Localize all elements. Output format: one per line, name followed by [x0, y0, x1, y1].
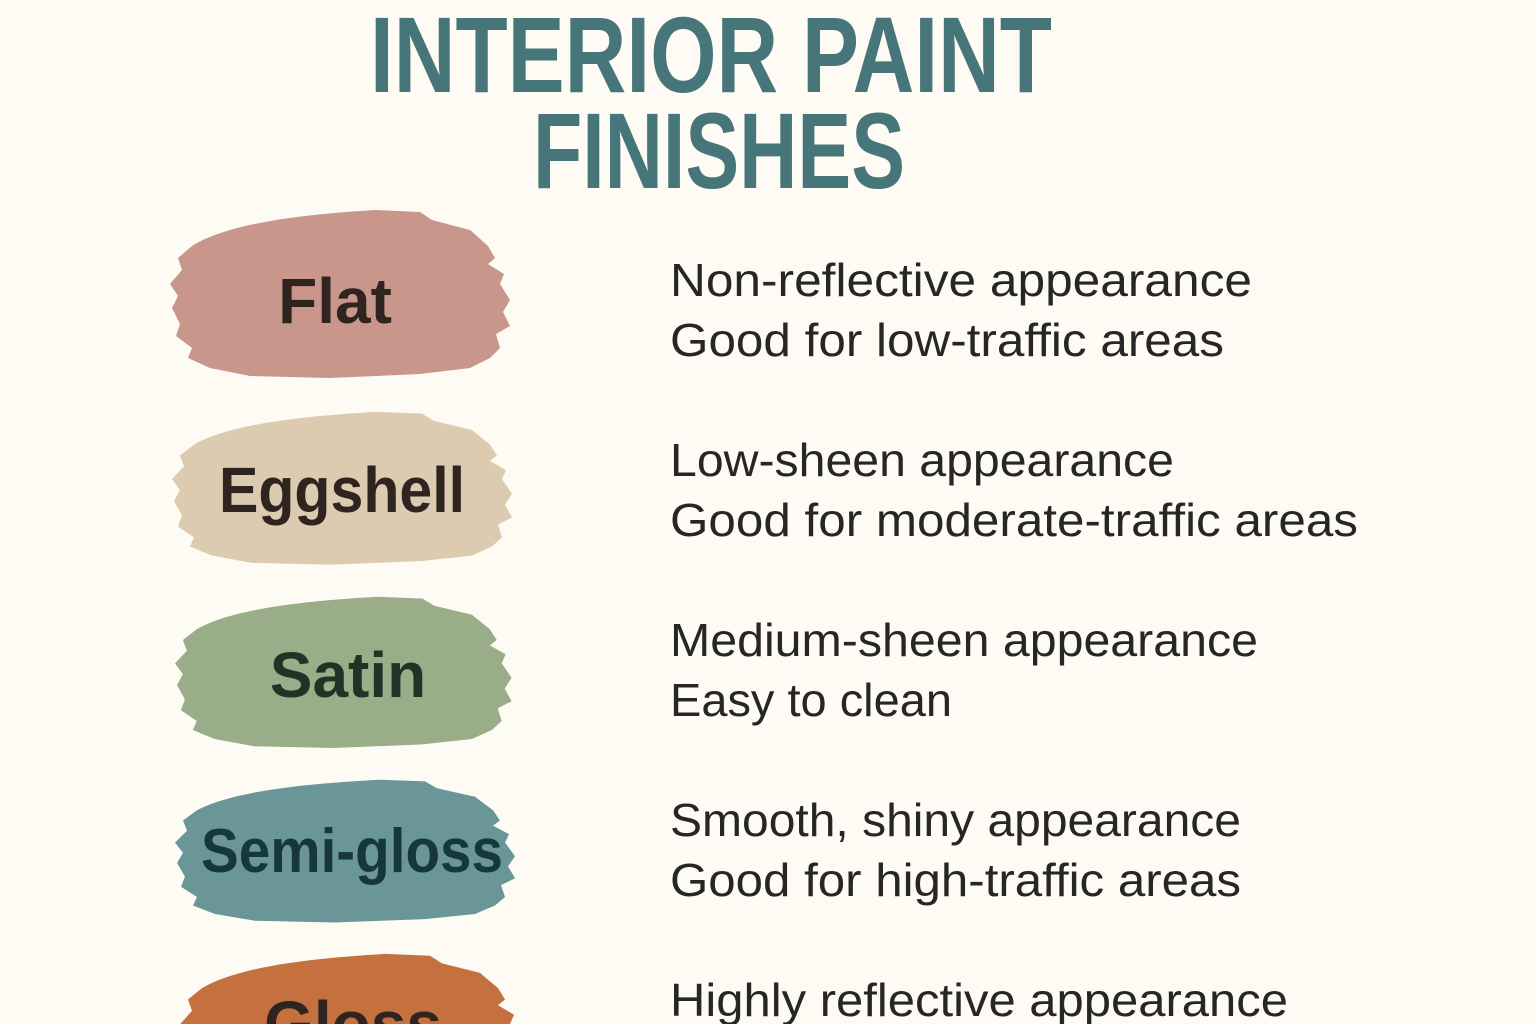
- desc: Eggshell: Good for moderate-traffic areas: [670, 494, 1358, 546]
- desc: Flat: Non-reflective appearance: [670, 254, 1252, 306]
- desc: Satin: Easy to clean: [670, 674, 952, 726]
- swatch: Flat: Flat: [278, 265, 392, 337]
- desc: Semi-gloss: Good for high-traffic areas: [670, 854, 1241, 906]
- swatch: Semi-gloss: [175, 780, 515, 922]
- desc: Flat: Good for low-traffic areas: [670, 314, 1224, 366]
- desc: Satin: Medium-sheen appearance: [670, 614, 1258, 666]
- swatch: Satin: Satin: [270, 639, 426, 711]
- desc: Eggshell: [670, 434, 1358, 546]
- desc: Semi-gloss: Smooth, shiny appearance: [670, 794, 1241, 846]
- desc: Flat: [670, 254, 1252, 366]
- swatch: Gloss: [180, 954, 520, 1024]
- swatch: Eggshell: [172, 412, 512, 565]
- desc: Satin: [670, 614, 1258, 726]
- descriptions: [670, 254, 1358, 1024]
- swatch: Semi-gloss: Semi-gloss: [201, 817, 503, 886]
- desc: Eggshell: Low-sheen appearance: [670, 434, 1174, 486]
- swatch: Flat: [170, 210, 510, 378]
- title: FINISHES: [533, 90, 905, 211]
- desc: Semi-gloss: [670, 794, 1241, 906]
- swatch: Satin: [175, 597, 512, 748]
- title: [370, 0, 1052, 211]
- swatch: Eggshell: Eggshell: [219, 454, 465, 526]
